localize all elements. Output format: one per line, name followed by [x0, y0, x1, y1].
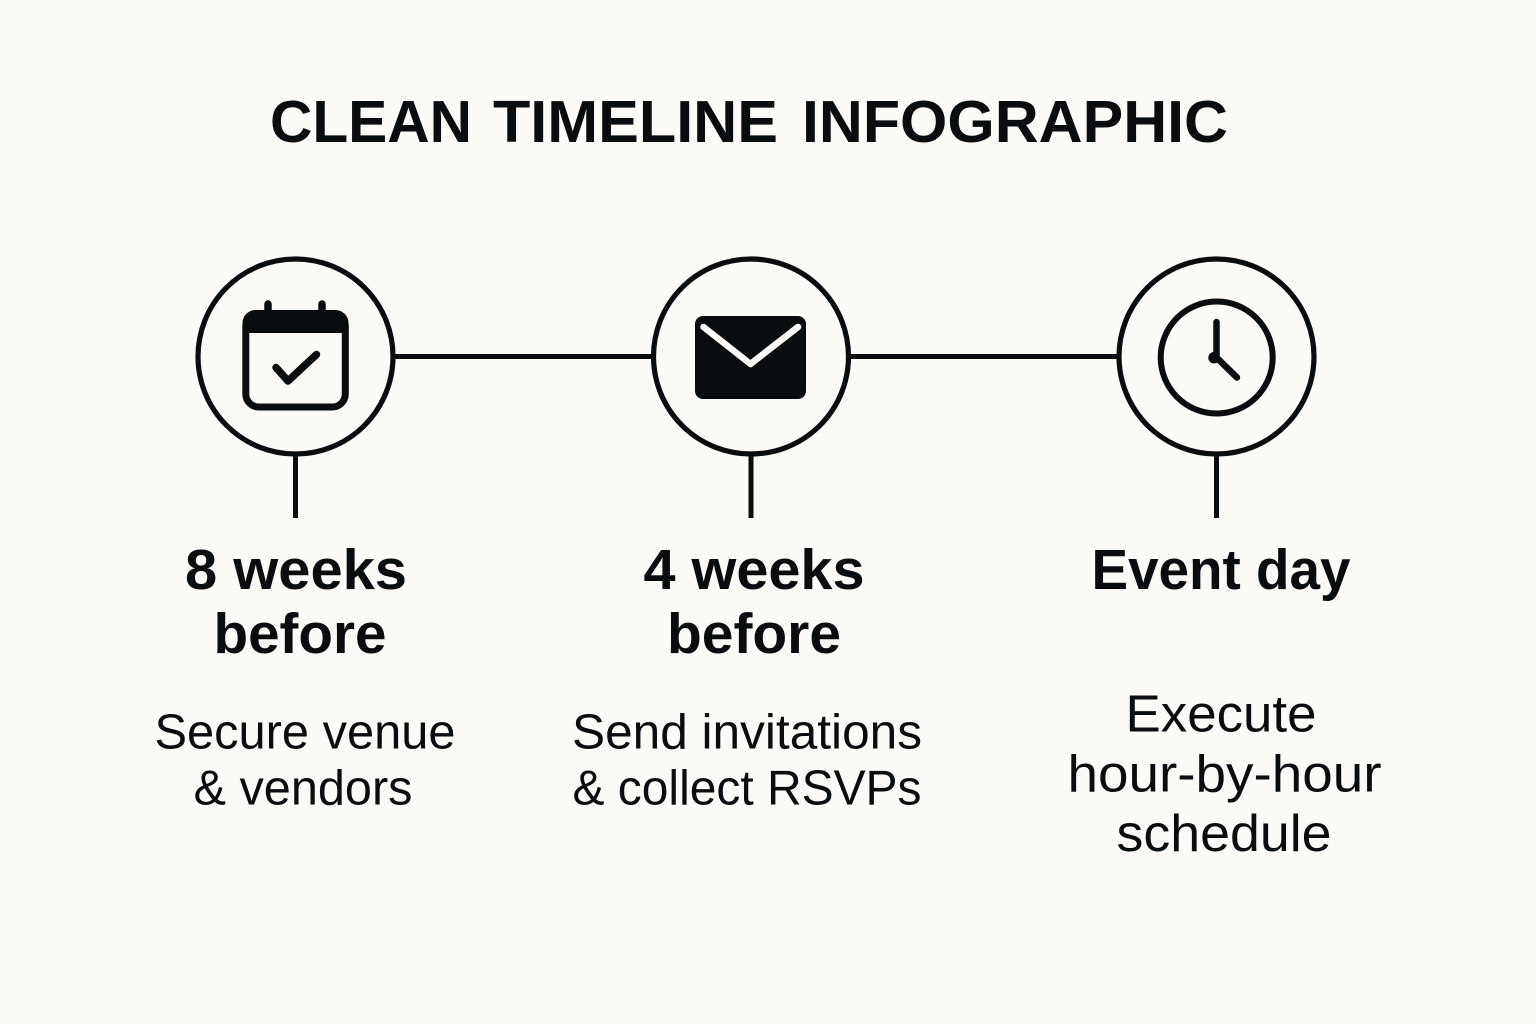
heading: event day: Event day [1092, 538, 1351, 602]
stem 2 [748, 455, 754, 518]
title [270, 89, 1228, 155]
description: secure venue and vendors: & vendors [194, 762, 412, 816]
node circle 1 [198, 259, 393, 454]
title: TIMELINE [493, 89, 778, 155]
description: secure venue and vendors [154, 706, 456, 816]
heading: 8 weeks before: 8 weeks [185, 538, 407, 602]
title: CLEAN [270, 89, 472, 155]
timeline connector: 8 weeks to 4 weeks [393, 354, 653, 359]
heading: 8 weeks before [185, 538, 407, 666]
description: execute hour-by-hour schedule [1068, 686, 1382, 863]
description: send invitations and collect RSVPs: & collect RSVPs [572, 762, 922, 816]
stem 3 [1214, 455, 1219, 518]
milestone 2: 4 weeks before [572, 259, 922, 816]
icon: clock [1161, 302, 1273, 414]
description: secure venue and vendors: Secure venue [154, 706, 456, 760]
description: send invitations and collect RSVPs [572, 706, 922, 816]
timeline connector: 4 weeks to event day [849, 354, 1119, 359]
title: INFOGRAPHIC [802, 89, 1228, 155]
description: execute hour-by-hour schedule: schedule [1116, 805, 1332, 863]
heading: 4 weeks before: before [667, 602, 841, 666]
stem 1 [293, 455, 298, 518]
node circle 3 [1119, 259, 1314, 454]
description: send invitations and collect RSVPs: Send invitations [572, 706, 922, 760]
icon: calendar with check [242, 304, 348, 407]
description: execute hour-by-hour schedule: Execute [1126, 686, 1316, 744]
milestone 1: 8 weeks before [154, 259, 456, 816]
node circle 2 [654, 259, 848, 454]
heading: 4 weeks before [644, 538, 864, 666]
milestone 3: event day [1068, 259, 1382, 863]
icon: envelope [695, 316, 806, 399]
heading: 8 weeks before: before [214, 602, 386, 666]
description: execute hour-by-hour schedule: hour-by-hour [1068, 746, 1382, 804]
heading: 4 weeks before: 4 weeks [644, 538, 864, 602]
